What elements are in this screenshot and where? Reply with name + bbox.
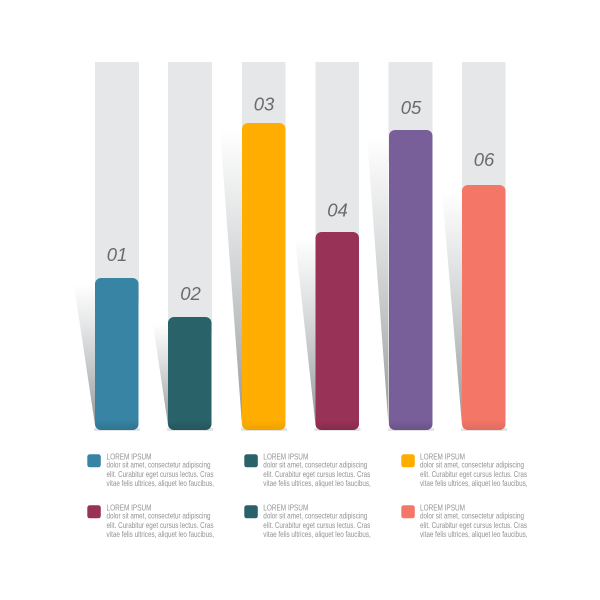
legend item: teal: LOREM IPSUM <box>263 503 308 513</box>
bar 01 <box>74 62 140 431</box>
bar 04 <box>295 62 360 431</box>
legend item: blue: LOREM IPSUM <box>106 452 152 462</box>
legend item: dark teal: elit. Curabitur eget cursus lectus. Cras <box>263 469 370 479</box>
legend item: amber: vitae felis ultrices, aliquet leo faucibus, <box>420 478 528 488</box>
legend item: coral: elit. Curabitur eget cursus lectus. Cras <box>420 520 527 530</box>
bar 01: 01 <box>107 244 127 265</box>
legend item: dark teal: dolor sit amet, consectetur adipiscing <box>263 460 368 470</box>
bar 02: 02 <box>180 283 201 304</box>
bar 05: 05 <box>401 97 422 118</box>
legend item: crimson: elit. Curabitur eget cursus lectus. Cras <box>106 520 214 530</box>
legend item: teal: dolor sit amet, consectetur adipiscing <box>263 511 368 521</box>
legend item: amber: elit. Curabitur eget cursus lectus. Cras <box>420 469 527 479</box>
legend item: crimson: vitae felis ultrices, aliquet leo faucibus, <box>106 529 214 539</box>
legend item: coral: vitae felis ultrices, aliquet leo faucibus, <box>420 529 528 539</box>
bar 06 <box>442 62 507 431</box>
legend item: coral <box>401 503 528 539</box>
bar 06: 06 <box>474 149 495 170</box>
legend item: dark teal <box>244 452 371 488</box>
legend item: blue: dolor sit amet, consectetur adipiscing <box>106 460 211 470</box>
legend item: coral: dolor sit amet, consectetur adipiscing <box>420 511 524 521</box>
legend item: blue: vitae felis ultrices, aliquet leo faucibus, <box>106 478 214 488</box>
legend item: teal: vitae felis ultrices, aliquet leo faucibus, <box>263 529 371 539</box>
bar 04: 04 <box>327 200 348 220</box>
legend item: amber: LOREM IPSUM <box>420 452 465 462</box>
bar 03 <box>220 62 287 431</box>
legend item: crimson: dolor sit amet, consectetur adipiscing <box>106 511 211 521</box>
legend item: blue <box>87 452 214 488</box>
legend item: dark teal: LOREM IPSUM <box>263 452 308 462</box>
chart: six bars <box>74 62 507 431</box>
legend item: crimson: LOREM IPSUM <box>106 503 152 513</box>
bar 02 <box>153 62 213 431</box>
legend item: amber: dolor sit amet, consectetur adipiscing <box>420 460 524 470</box>
legend <box>87 452 528 539</box>
legend item: crimson <box>87 503 214 539</box>
bar 03: 03 <box>254 94 275 114</box>
legend item: teal <box>244 503 371 539</box>
legend item: amber <box>401 452 528 488</box>
legend item: dark teal: vitae felis ultrices, aliquet leo faucibus, <box>263 478 371 488</box>
bar 05 <box>367 62 434 431</box>
legend item: blue: elit. Curabitur eget cursus lectus. Cras <box>106 469 214 479</box>
legend item: teal: elit. Curabitur eget cursus lectus. Cras <box>263 520 370 530</box>
legend item: coral: LOREM IPSUM <box>420 503 465 513</box>
